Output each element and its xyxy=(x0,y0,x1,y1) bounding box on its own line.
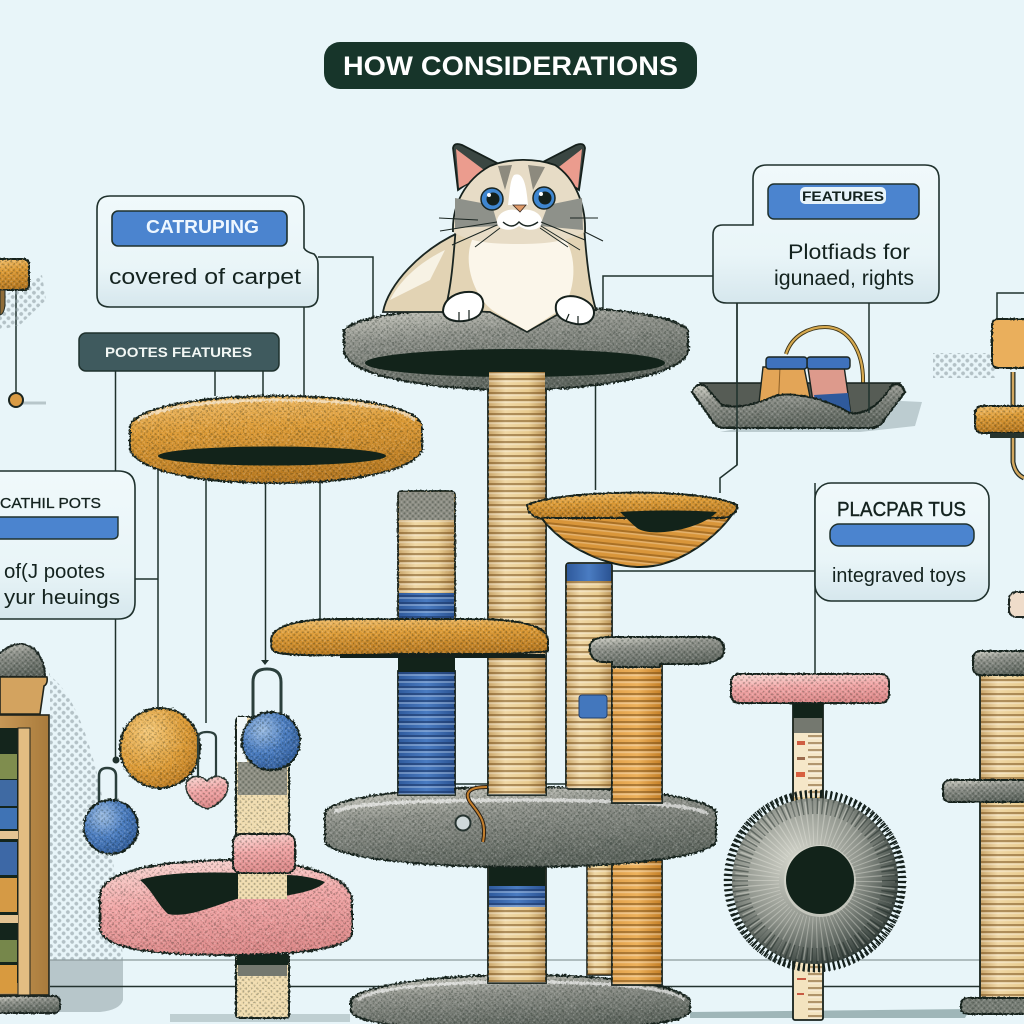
cabinet base xyxy=(0,996,60,1013)
blue bar xyxy=(830,524,974,546)
head outline xyxy=(453,160,585,232)
callout: features xyxy=(713,165,939,303)
grey face mask xyxy=(455,198,583,230)
bed opening xyxy=(140,873,325,915)
spiky ball with hole xyxy=(726,792,904,970)
left cabinet with basket xyxy=(0,644,60,1013)
small grey shelf xyxy=(590,637,724,667)
hole rim xyxy=(784,845,856,917)
ring opening xyxy=(158,446,386,466)
central cat tree xyxy=(271,306,737,1024)
hammock opening xyxy=(620,510,717,532)
orange shelf xyxy=(271,619,548,655)
pink collar xyxy=(233,834,295,873)
cat xyxy=(383,144,603,332)
pink shelf post xyxy=(731,674,889,1020)
body text: covered of carpet xyxy=(109,264,301,289)
body xyxy=(445,225,596,332)
white heading chip xyxy=(800,187,886,204)
basket xyxy=(0,677,47,714)
white blaze xyxy=(508,174,528,205)
chest xyxy=(469,234,573,331)
tray back xyxy=(700,383,900,418)
hanging toy: pink heart xyxy=(186,732,228,809)
top cap xyxy=(973,651,1024,675)
right tall post xyxy=(943,651,1024,1014)
halftone wall shadow xyxy=(45,673,123,1012)
post inside bed xyxy=(238,873,287,899)
pink cup xyxy=(807,357,851,416)
left paw xyxy=(443,292,483,321)
pink shelf xyxy=(731,674,889,703)
heading text: FEATURES xyxy=(802,188,884,204)
left ear xyxy=(453,144,497,190)
handle xyxy=(786,327,863,384)
label: pootes features: POOTES FEATURES xyxy=(105,344,252,360)
heading text: PLACPAR TUS xyxy=(837,499,966,521)
right ear xyxy=(541,144,585,190)
shelved items xyxy=(0,754,17,779)
title pill: HOW CONSIDERATIONS xyxy=(343,51,678,81)
body text: integraved toys xyxy=(832,565,966,587)
upper post xyxy=(236,717,289,907)
knob and string xyxy=(456,816,470,830)
pink bed xyxy=(100,860,352,955)
left edge: hanging fragment and toy xyxy=(0,259,46,407)
body text: Plotfiads for xyxy=(788,241,910,264)
main tall post xyxy=(488,370,546,795)
title pill xyxy=(324,42,697,89)
carpet dome xyxy=(0,644,45,677)
nose xyxy=(513,205,526,212)
orange ring platform xyxy=(130,396,422,483)
body text line 2: igunaed, rights xyxy=(774,267,914,290)
bed with cups xyxy=(692,303,922,465)
whiskers xyxy=(439,218,603,250)
orange post xyxy=(612,660,662,803)
mid shelf xyxy=(943,780,1024,802)
body text line 2: yur heuings xyxy=(4,587,120,609)
heading text: CATHIL POTS xyxy=(0,495,101,512)
tail and back xyxy=(383,232,460,312)
blue heading bar xyxy=(768,184,919,219)
hanging toy: orange ball xyxy=(120,708,200,788)
right eye xyxy=(533,187,555,209)
orange cup xyxy=(758,357,813,412)
heading text: CATRUPING xyxy=(146,217,259,237)
muzzle xyxy=(497,210,542,230)
forehead stripes xyxy=(498,165,545,190)
blue heading bar xyxy=(112,211,287,246)
top platform xyxy=(344,306,688,390)
right edge: hanging fragments xyxy=(933,319,1024,617)
callout: catail posts xyxy=(0,471,135,619)
hanging toy: blue ball xyxy=(84,768,138,854)
connector lines xyxy=(16,257,1024,760)
top line behind big disc xyxy=(455,783,566,785)
tray front xyxy=(692,384,905,428)
short post: blue and rope xyxy=(398,671,455,795)
body text: of(J pootes xyxy=(4,561,105,583)
right paw xyxy=(556,296,594,324)
base xyxy=(961,998,1024,1014)
head xyxy=(453,160,585,244)
hammock xyxy=(540,510,735,567)
left scratching post with pink bed xyxy=(100,660,352,1018)
hook and blue ball xyxy=(253,669,281,720)
shadow xyxy=(720,400,922,432)
lower posts xyxy=(587,860,613,975)
label: pootes features xyxy=(79,333,279,371)
hanging toy: left knob xyxy=(112,756,120,764)
callout: catruping xyxy=(97,196,318,307)
base disc xyxy=(351,975,690,1024)
platform underside xyxy=(365,349,665,377)
left eye xyxy=(481,188,503,210)
cabinet frame xyxy=(0,715,49,995)
big grey disc xyxy=(325,787,716,867)
shelf underside xyxy=(340,654,545,658)
lower post xyxy=(236,955,289,1018)
rope post with blue tag xyxy=(566,563,612,789)
hole xyxy=(786,846,854,914)
callout: placpar tus xyxy=(815,483,989,601)
post neck xyxy=(489,372,545,392)
blue bar xyxy=(0,517,118,539)
connector lines over tray xyxy=(737,303,869,465)
floor shadows xyxy=(170,1009,970,1022)
wall and floor lines xyxy=(50,960,980,986)
